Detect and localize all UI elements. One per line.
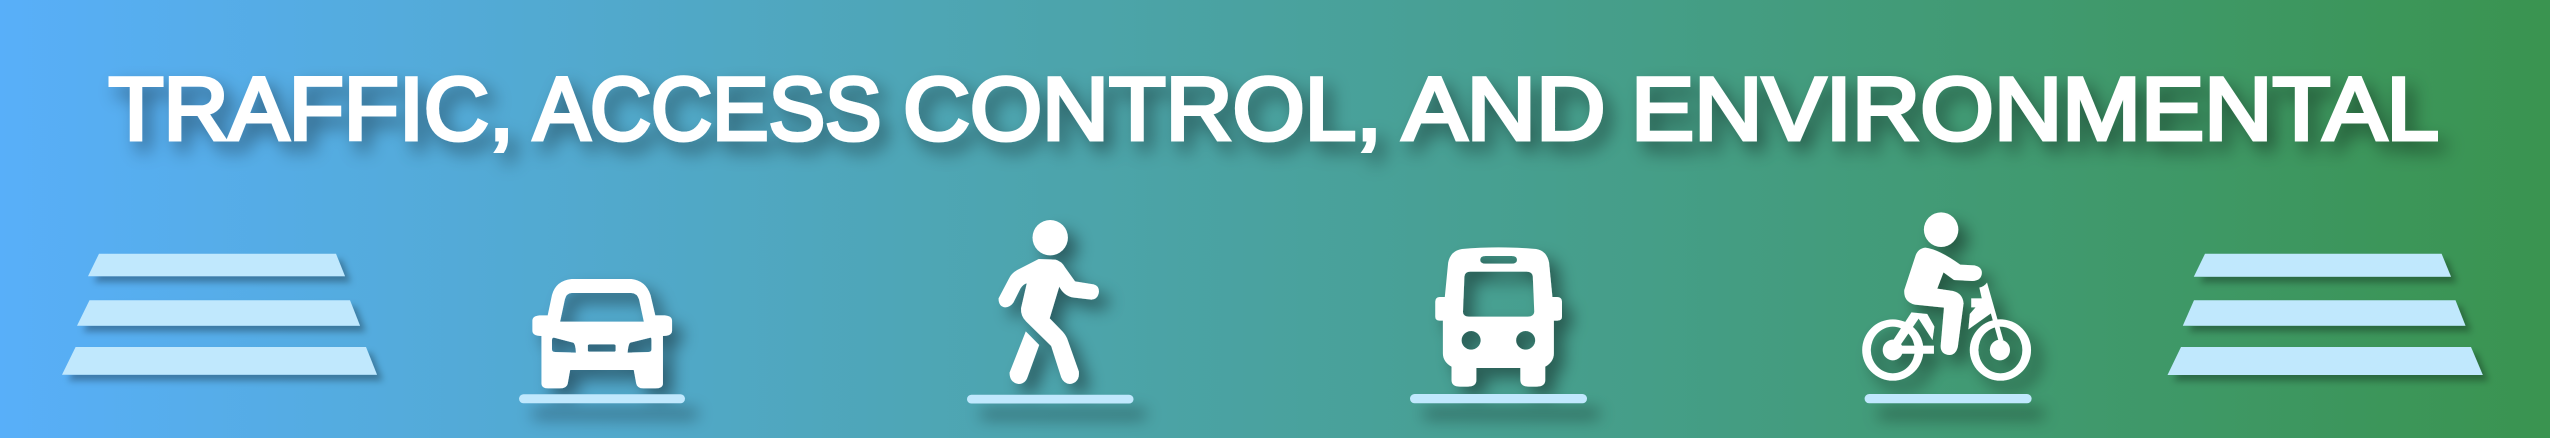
crosswalk stripes: left — [62, 254, 377, 375]
car ground line — [519, 394, 685, 403]
crosswalk stripes: right — [2168, 254, 2483, 375]
cyclist ground line — [1865, 394, 2032, 403]
bus ground line — [1410, 394, 1587, 403]
title: AND — [1402, 59, 1606, 159]
title: ENVIRONMENTAL — [1631, 59, 2439, 159]
icon: pedestrian — [999, 220, 1099, 384]
title: TRAFFIC, — [108, 59, 514, 159]
title — [108, 59, 2439, 159]
icon: car — [532, 279, 672, 388]
pedestrian ground line — [967, 395, 1134, 404]
title: CONTROL, — [903, 59, 1382, 159]
title: ACCESS — [534, 59, 882, 159]
icon: bus — [1435, 247, 1562, 387]
icon: cyclist — [1862, 212, 2031, 381]
